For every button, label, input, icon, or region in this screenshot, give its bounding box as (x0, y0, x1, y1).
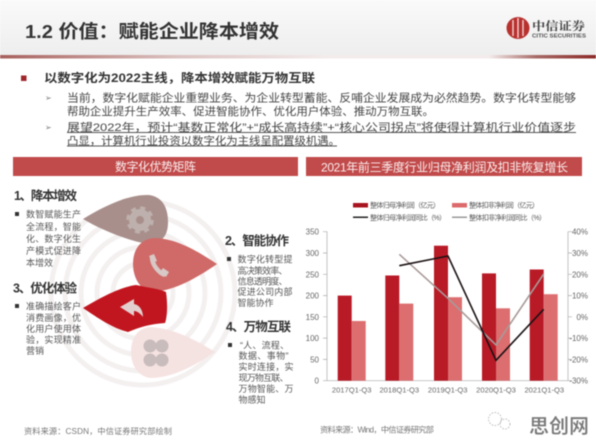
item 3: experience optimisation (13, 280, 81, 356)
right axis labels: -20% (569, 355, 588, 364)
item 3: experience optimisation: 化用户使用体 (26, 323, 81, 334)
category labels: 2020Q1-Q3 (476, 386, 516, 394)
left axis labels: 200 (306, 292, 320, 301)
category labels (332, 386, 564, 394)
bars: adjusted net profit (352, 294, 558, 381)
watermark: 思创网 (529, 415, 589, 438)
legend: 整体扣非净利润同比（%） (469, 213, 546, 222)
title: 1.2 价值：赋能企业降本增效 (25, 21, 280, 42)
sub point 2 underlined: ➢ (45, 123, 52, 132)
item 4: internet of things: 万物智能、万 (238, 383, 294, 394)
left axis labels: 350 (306, 228, 320, 237)
panel: digital advantage matrix (13, 157, 298, 436)
icon: wechat watermark (488, 412, 510, 429)
legend (353, 200, 546, 222)
item 1: cost reduction: 数智赋能生产 (26, 208, 81, 220)
item 3: experience optimisation: 营销 (26, 345, 44, 356)
item 2: smart collaboration (225, 233, 292, 308)
line: adjusted profit growth (399, 254, 544, 345)
right axis labels: 10% (572, 292, 588, 301)
item 4: internet of things: “人、流程、 (240, 340, 289, 350)
item 2: smart collaboration: 信息透明度、 (238, 276, 288, 286)
item 1: cost reduction: 1、降本增效 (14, 188, 77, 203)
category labels: 2019Q1-Q3 (428, 386, 468, 394)
left axis labels (306, 228, 320, 386)
panel heading: 数字化优势矩阵 (115, 159, 196, 174)
left axis labels: 150 (306, 313, 320, 322)
petal 3: arrow (83, 285, 167, 332)
right axis labels: 40% (572, 228, 588, 237)
item 2: smart collaboration: 高决策效率、 (238, 265, 288, 276)
main bullet (21, 76, 26, 81)
item 1: cost reduction (14, 188, 81, 268)
petal 2: phone (133, 238, 217, 292)
item 4: internet of things: 实时连接，实 (238, 361, 294, 372)
legend: 整体归母净利润同比（%） (370, 213, 446, 222)
category labels: 2017Q1-Q3 (332, 386, 372, 394)
item 2: smart collaboration: 智能协作 (238, 297, 274, 308)
left axis labels: 100 (306, 334, 320, 343)
left axis labels: 0 (315, 377, 320, 386)
text block: key points (21, 70, 576, 148)
left axis labels: 50 (310, 355, 320, 364)
sub point 1: ➢ (45, 94, 52, 102)
category labels: 2018Q1-Q3 (379, 386, 419, 394)
sub point 1: 帮助企业提升生产效率、促进智能协作、优化用户体验、推动万物互联。 (67, 104, 434, 118)
axes (323, 232, 572, 381)
right axis labels: -30% (569, 377, 588, 386)
sub point 2 underlined: 凸显，计算机行业投资以数字化为主线呈配置级机遇。 (67, 134, 340, 148)
logo: CITIC Securities: 中信证券 (532, 19, 586, 33)
right axis labels: 0% (576, 313, 588, 322)
legend: 整体扣非净利润（亿元） (469, 200, 539, 210)
legend: 整体归母净利润（亿元） (370, 200, 440, 210)
item 1: cost reduction: 本增效 (26, 257, 53, 268)
source note left: 资料来源：CSDN，中信证券研究部绘制 (24, 426, 172, 436)
chart heading: 2021年前三季度行业归母净利润及扣非恢复增长 (321, 160, 568, 174)
concentric rings (51, 201, 235, 385)
item 4: internet of things: 数据、事物” (238, 350, 288, 361)
item 4: internet of things: 4、万物互联 (226, 319, 291, 334)
right axis labels: -10% (569, 334, 588, 343)
item 4: internet of things: 物感知 (238, 394, 266, 405)
chart heading (306, 157, 582, 176)
main point: 以数字化为2022主线，降本增效赋能万物互联 (44, 70, 315, 85)
item 3: experience optimisation: 验，实现精准 (26, 334, 81, 345)
panel: profit recovery chart (306, 157, 588, 434)
panel heading (13, 157, 298, 176)
source note right: 资料来源：Wind，中信证券研究部 (320, 424, 434, 434)
item 1: cost reduction: 产模式促进降 (26, 245, 81, 256)
item 2: smart collaboration: 2、智能协作 (225, 233, 289, 248)
logo: CITIC Securities: CITIC SECURITIES (532, 34, 587, 40)
item 1: cost reduction: 化、数字化生 (26, 233, 81, 244)
sub point 2 underlined: 展望2022年，预计“基数正常化”+“成长高持续”+“核心公司拐点”将使得计算机行业价值逐步 (67, 120, 576, 134)
sub point 1 (45, 90, 576, 118)
category labels: 2021Q1-Q3 (524, 386, 564, 394)
item 3: experience optimisation: 准确描绘客户 (26, 300, 81, 312)
sub point 2 underlined (45, 120, 576, 148)
petal 4: clover (131, 327, 215, 378)
left axis labels: 300 (306, 249, 320, 258)
item 1: cost reduction: 全流程，智能 (26, 221, 81, 232)
header band (0, 0, 596, 58)
left axis labels: 250 (306, 270, 320, 279)
item 3: experience optimisation: 消费画像，优 (26, 312, 81, 323)
right axis labels (569, 228, 588, 386)
logo: CITIC Securities (506, 17, 587, 40)
right axis labels: 20% (572, 270, 588, 279)
item 2: smart collaboration: 数字化转型提 (238, 254, 292, 264)
sub point 1: 当前，数字化赋能企业重塑业务、为企业转型蓄能、反哺企业发展成为必然趋势。数字化转型能够 (67, 90, 576, 104)
item 2: smart collaboration: 促进公司内部 (238, 286, 292, 297)
bars: net profit (338, 246, 544, 381)
item 4: internet of things: 现万物互联、 (238, 372, 288, 383)
line: net profit growth (399, 256, 544, 360)
petal 1: gear (83, 195, 168, 244)
item 4: internet of things (226, 319, 294, 405)
item 3: experience optimisation: 3、优化体验 (13, 280, 77, 296)
right axis labels: 30% (572, 249, 588, 258)
